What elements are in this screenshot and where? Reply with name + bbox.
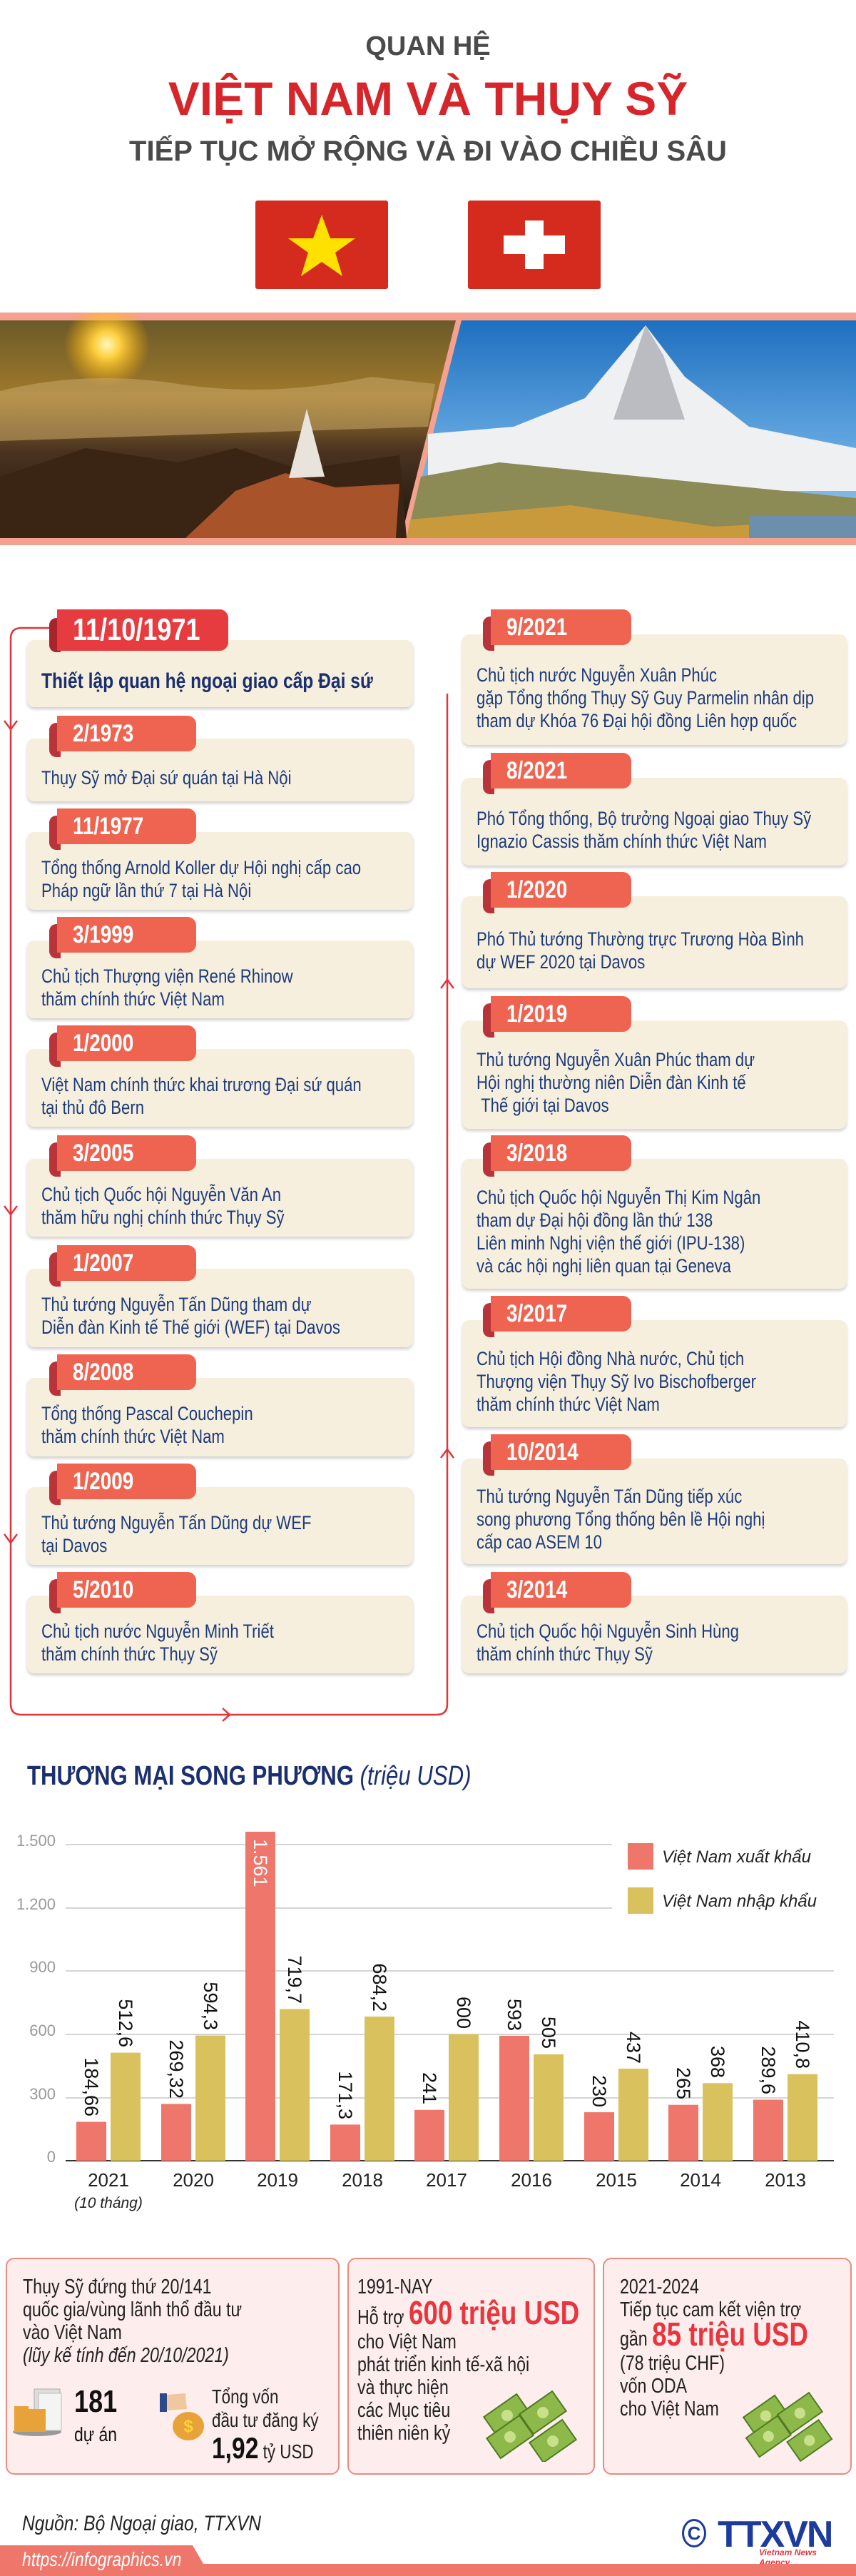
bar chart: 719,7 [284,1955,305,2004]
event 9/2021: gặp Tổng thống Thụy Sỹ Guy Parmelin nhân dịp [477,686,814,708]
text: support [357,2276,579,2445]
event 1/2007 [26,1245,414,1351]
text: support: cho Việt Nam [357,2331,457,2353]
left column events [26,609,414,1677]
event 11/1977: Pháp ngữ lần thứ 7 tại Hà Nội [41,879,251,901]
bar chart: 289,6 [758,2046,779,2094]
bar chart: 2015 [596,2169,637,2191]
event 3/2017: 3/2017 [506,1300,567,1327]
event 1/2019: 1/2019 [506,1000,567,1028]
text: commitment [620,2276,808,2420]
event 9/2021: tham dự Khóa 76 Đại hội đồng Liên hợp quốc [477,709,797,731]
event 5/2010 [26,1572,414,1677]
event 3/2014 [461,1572,848,1677]
bar chart: 368 [707,2046,728,2078]
event 3/1999: thăm chính thức Việt Nam [41,988,225,1009]
source: Nguồn: Bộ Ngoại giao, TTXVN [22,2512,261,2535]
bar chart: 241 [419,2072,440,2104]
text: ranking: vào Việt Nam [23,2321,122,2344]
event 5/2010: 5/2010 [73,1576,133,1603]
event 3/2017: thăm chính thức Việt Nam [477,1394,660,1415]
bar chart: 2020 [173,2169,214,2191]
icon: money bag: $ [183,2417,193,2436]
text: commitment: Tiếp tục cam kết viện trợ [620,2298,801,2321]
text: commitment: cho Việt Nam [620,2398,719,2420]
footer band [0,2545,856,2576]
event 1/2009: Thủ tướng Nguyễn Tấn Dũng dự WEF [41,1511,311,1533]
bar chart: 0 [47,2148,56,2166]
text: ranking: (lũy kế tính đến 20/10/2021) [23,2344,229,2367]
bar chart: 1.500 [16,1832,56,1850]
stat: 181 projects [74,2384,117,2445]
event 3/2018 [461,1135,848,1292]
text: ranking: Thụy Sỹ đứng thứ 20/141 [23,2276,212,2298]
event 3/2005: 3/2005 [73,1140,133,1167]
event 10/2014: song phương Tổng thống bên lề Hội nghị [477,1508,765,1530]
title: quan he: QUAN HỆ [365,31,491,61]
bar chart: 437 [623,2032,644,2064]
event 3/2005: Chủ tịch Quốc hội Nguyễn Văn An [41,1183,281,1205]
event 1/2009: 1/2009 [73,1468,133,1495]
event 11/10/1971: 11/10/1971 [73,612,200,647]
event 9/2021 [461,609,848,749]
event 3/2017: Thượng viện Thụy Sỹ Ivo Bischofberger [477,1371,756,1392]
event 9/2021: Chủ tịch nước Nguyễn Xuân Phúc [477,664,717,685]
panel: ODA 2021-2024 [603,2258,852,2475]
event 10/2014: cấp cao ASEM 10 [477,1531,602,1553]
event 1/2019: Thế giới tại Davos [481,1095,609,1116]
icon: money stacks [742,2392,833,2462]
logo: TTXVN [682,2514,832,2567]
bar chart: 2017 [426,2169,467,2191]
event 3/2018: Chủ tịch Quốc hội Nguyễn Thị Kim Ngân [477,1187,760,1208]
event 2/1973: Thụy Sỹ mở Đại sứ quán tại Hà Nội [41,767,292,788]
event 3/2018: và các hội nghị liên quan tại Geneva [477,1255,731,1277]
bar chart: 184,66 [81,2057,102,2116]
bar chart: 230 [588,2075,610,2107]
event 5/2010: thăm chính thức Thụy Sỹ [41,1643,218,1664]
bar chart: 1.200 [16,1895,56,1913]
bar chart: 265 [673,2067,694,2099]
icon: Vietnam flag [255,201,388,289]
text: support: Hỗ trợ 600 triệu USD [357,2294,579,2331]
event 3/2014: Chủ tịch Quốc hội Nguyễn Sinh Hùng [477,1620,739,1641]
text: commitment: vốn ODA [620,2375,687,2398]
bar chart: 2021 [88,2169,129,2191]
event 1/2019: Hội nghị thường niên Diễn đàn Kinh tế [477,1072,746,1093]
text: ranking: quốc gia/vùng lãnh thổ đầu tư [23,2298,242,2321]
event 10/2014: Thủ tướng Nguyễn Tấn Dũng tiếp xúc [477,1486,742,1507]
event 11/1977: 11/1977 [73,813,143,840]
bar chart: 593 [504,1999,525,2031]
text: support: thiên niên kỷ [357,2422,450,2445]
text: ranking [23,2276,242,2367]
bar chart: Việt Nam xuất khẩu [662,1847,811,1867]
event 1/2019: Thủ tướng Nguyễn Xuân Phúc tham dự [477,1049,755,1070]
text: support: các Mục tiêu [357,2399,450,2422]
stat: 181 projects: dự án [74,2423,117,2445]
event 8/2008: Tổng thống Pascal Couchepin [41,1403,253,1424]
subtitle: TIẾP TỤC MỞ RỘNG VÀ ĐI VÀO CHIỀU SÂU [129,136,727,167]
stat: total capital: đầu tư đăng ký [212,2409,318,2431]
event 1/2000: 1/2000 [73,1030,133,1057]
bar chart: 505 [538,2017,559,2049]
event 8/2008: thăm chính thức Việt Nam [41,1426,225,1447]
event 1/2020 [461,872,848,992]
bar chart: 2018 [342,2169,383,2191]
panel: investment [6,2258,340,2475]
right column events [461,609,848,1677]
event 1/2020: Phó Thủ tướng Thường trực Trương Hòa Bình [477,928,804,950]
icon: Swiss flag [468,201,601,289]
title: main: VIỆT NAM VÀ THỤY SỸ [168,72,688,125]
bar chart: 1.561 [250,1839,271,1887]
event 8/2021: Ignazio Cassis thăm chính thức Việt Nam [477,831,767,852]
bar chart: 269,32 [165,2039,187,2099]
event 3/2018: tham dự Đại hội đồng lần thứ 138 [477,1210,713,1231]
bar chart: 600 [453,1997,474,2029]
event 10/2014: 10/2014 [506,1439,579,1466]
event 3/1999: 3/1999 [73,921,133,948]
bar chart: 512,6 [115,1999,136,2047]
bar chart: 594,3 [200,1982,221,2030]
timeline connector [4,627,454,1722]
stat: total capital [212,2385,318,2465]
bar chart: 410,8 [792,2020,813,2069]
event 1/2007: Thủ tướng Nguyễn Tấn Dũng tham dự [41,1294,312,1315]
stat: total capital: 1,92 tỷ USD [212,2431,314,2465]
bar chart: (10 tháng) [74,2195,143,2211]
bar chart: 171,3 [335,2071,356,2119]
event 3/2018: 3/2018 [506,1140,567,1167]
event 1/2019 [461,996,848,1132]
bar chart: 900 [29,1958,56,1976]
event 11/10/1971: Thiết lập quan hệ ngoại giao cấp Đại sứ [41,669,373,693]
stat: 181 projects: 181 [74,2384,117,2419]
event 11/10/1971 [26,609,414,711]
event 1/2009 [26,1464,414,1568]
chart title: THƯƠNG MẠI SONG PHƯƠNG (triệu USD) [27,1761,471,1791]
logo: TTXVN: Vietnam News Agency [759,2547,817,2567]
bar chart: 300 [29,2085,56,2103]
event 9/2021: 9/2021 [506,614,567,641]
event 3/2005 [26,1135,414,1240]
event 3/2014: thăm chính thức Thụy Sỹ [477,1643,653,1664]
icon: documents [13,2389,61,2436]
icon: money bag [160,2393,204,2440]
text: support: và thực hiện [357,2376,449,2399]
event 1/2000: Việt Nam chính thức khai trương Đại sứ quán [41,1073,362,1095]
event 2/1973 [26,716,414,805]
event 3/2005: thăm hữu nghị chính thức Thụy Sỹ [41,1206,285,1227]
bar chart: 2016 [511,2169,552,2191]
logo: TTXVN: C [688,2522,700,2544]
event 3/2017: Chủ tịch Hội đồng Nhà nước, Chủ tịch [477,1348,744,1369]
event 3/1999: Chủ tịch Thượng viện René Rhinow [41,965,293,986]
bar chart [16,1832,834,2211]
bar chart: 2014 [680,2169,721,2191]
event 1/2020: dự WEF 2020 tại Davos [477,951,645,973]
event 3/2018: Liên minh Nghị viện thế giới (IPU-138) [477,1232,745,1254]
bar chart: 684,2 [369,1963,390,2012]
event 3/2017 [461,1296,848,1431]
event 1/2020: 1/2020 [506,876,567,903]
event 2/1973: 2/1973 [73,720,133,747]
logo: TTXVN: TTXVN [718,2514,832,2555]
text: support: phát triển kinh tế-xã hội [357,2353,529,2376]
event 1/2007: Diễn đàn Kinh tế Thế giới (WEF) tại Davos [41,1317,340,1338]
event 5/2010: Chủ tịch nước Nguyễn Minh Triết [41,1620,274,1641]
event 1/2009: tại Davos [41,1534,107,1556]
event 1/2000: tại thủ đô Bern [41,1096,144,1117]
bar chart: Việt Nam nhập khẩu [662,1892,817,1911]
bar chart: 600 [29,2022,56,2039]
event 8/2021: 8/2021 [506,757,567,784]
event 8/2021 [461,753,848,869]
photo band [0,313,856,545]
event 1/2007: 1/2007 [73,1249,133,1277]
text: commitment: 2021-2024 [620,2276,699,2298]
text: support: 1991-NAY [357,2276,432,2298]
event 8/2008 [26,1354,414,1460]
text: commitment: (78 triệu CHF) [620,2352,725,2375]
event 11/1977 [26,808,414,913]
icon: money stacks [483,2390,577,2462]
event 1/2000 [26,1025,414,1130]
event 8/2008: 8/2008 [73,1359,133,1386]
event 3/2014: 3/2014 [506,1576,567,1603]
text: commitment: gần 85 triệu USD [620,2316,808,2353]
event 10/2014 [461,1434,848,1568]
event 11/1977: Tổng thống Arnold Koller dự Hội nghị cấp cao [41,856,361,878]
stat: total capital: Tổng vốn [212,2385,278,2408]
footer url: https://infographics.vn [22,2548,181,2570]
panel: ODA since 1991 [347,2258,595,2475]
event 3/1999 [26,917,414,1022]
event 8/2021: Phó Tổng thống, Bộ trưởng Ngoại giao Thụy Sỹ [477,808,811,829]
bar chart: 2013 [765,2169,806,2191]
bar chart: 2019 [257,2169,298,2191]
